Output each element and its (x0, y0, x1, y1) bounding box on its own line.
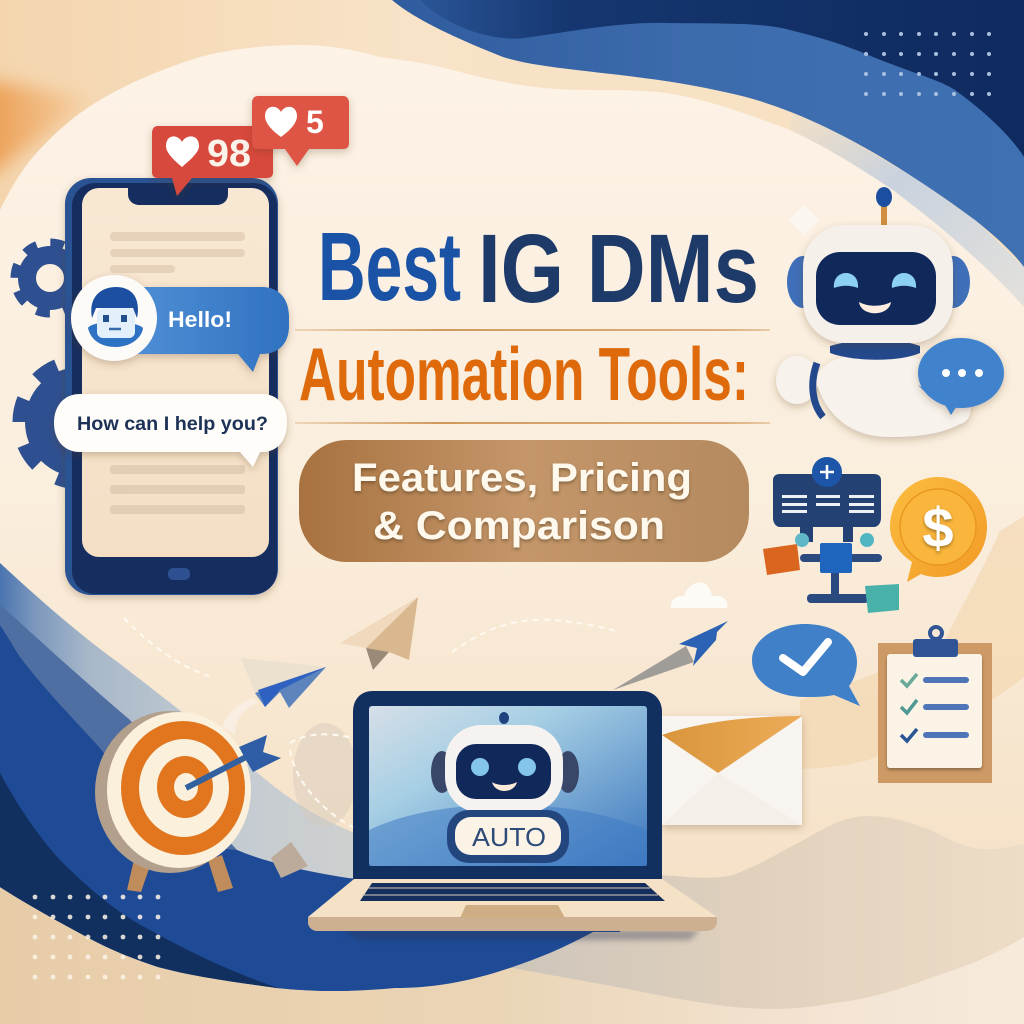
icon: check bubble (752, 624, 860, 706)
title: Best IG DMs: Best (318, 212, 461, 321)
notification: 98 likes: 98 (207, 133, 251, 175)
icon: blue paper plane (223, 658, 326, 735)
badge: AUTO: AUTO (472, 822, 546, 852)
robot top right (776, 187, 971, 437)
phone mockup (65, 178, 278, 595)
icon: target with arrow (95, 711, 281, 892)
pill: Features, Pricing & Comparison (299, 440, 749, 562)
notification: 98 likes (152, 126, 273, 196)
decorative small cube (271, 842, 308, 878)
chat bubble: How can I help you (54, 394, 287, 467)
laptop (308, 691, 717, 940)
notification: 5 likes: 5 (306, 104, 324, 140)
chat bubble: Hello: Hello! (168, 307, 232, 332)
title: Best IG DMs: IG DMs (478, 214, 759, 323)
icon: beige paper plane (340, 597, 418, 670)
divider rule lower (295, 422, 770, 424)
dashed flight paths (124, 618, 620, 840)
message placeholder lines bottom (110, 465, 245, 514)
icon: gears behind phone (15, 243, 140, 482)
dots top right (864, 32, 991, 96)
chat bubble: Hello (71, 275, 289, 372)
notification: 5 likes (252, 96, 349, 166)
icon: workflow diagram (763, 457, 899, 613)
icon: dollar coin bubble (890, 477, 987, 582)
chat bubble: How can I help you: How can I help you? (77, 413, 268, 435)
icon: dollar coin bubble: $ (922, 496, 954, 559)
divider rule upper (295, 329, 770, 331)
icon: clipboard checklist (878, 627, 992, 783)
subtitle: Automation Tools: Automation Tools: (299, 332, 749, 416)
pill: Features, Pricing & Comparison: & Comparison (373, 504, 665, 548)
icon: arrow upward (613, 621, 728, 690)
pill: Features, Pricing & Comparison: Features, Pricing (352, 456, 692, 500)
badge: AUTO (447, 810, 569, 863)
icon: envelope (662, 716, 802, 825)
robot on laptop (431, 712, 579, 813)
avatar (71, 275, 157, 361)
icon: robot chat bubble (918, 338, 1004, 415)
icon: cloud (671, 582, 727, 608)
dots bottom left (33, 895, 160, 979)
message placeholder lines top (110, 232, 245, 273)
icon: sparkle (789, 205, 819, 235)
title: Best IG DMs (318, 212, 759, 323)
